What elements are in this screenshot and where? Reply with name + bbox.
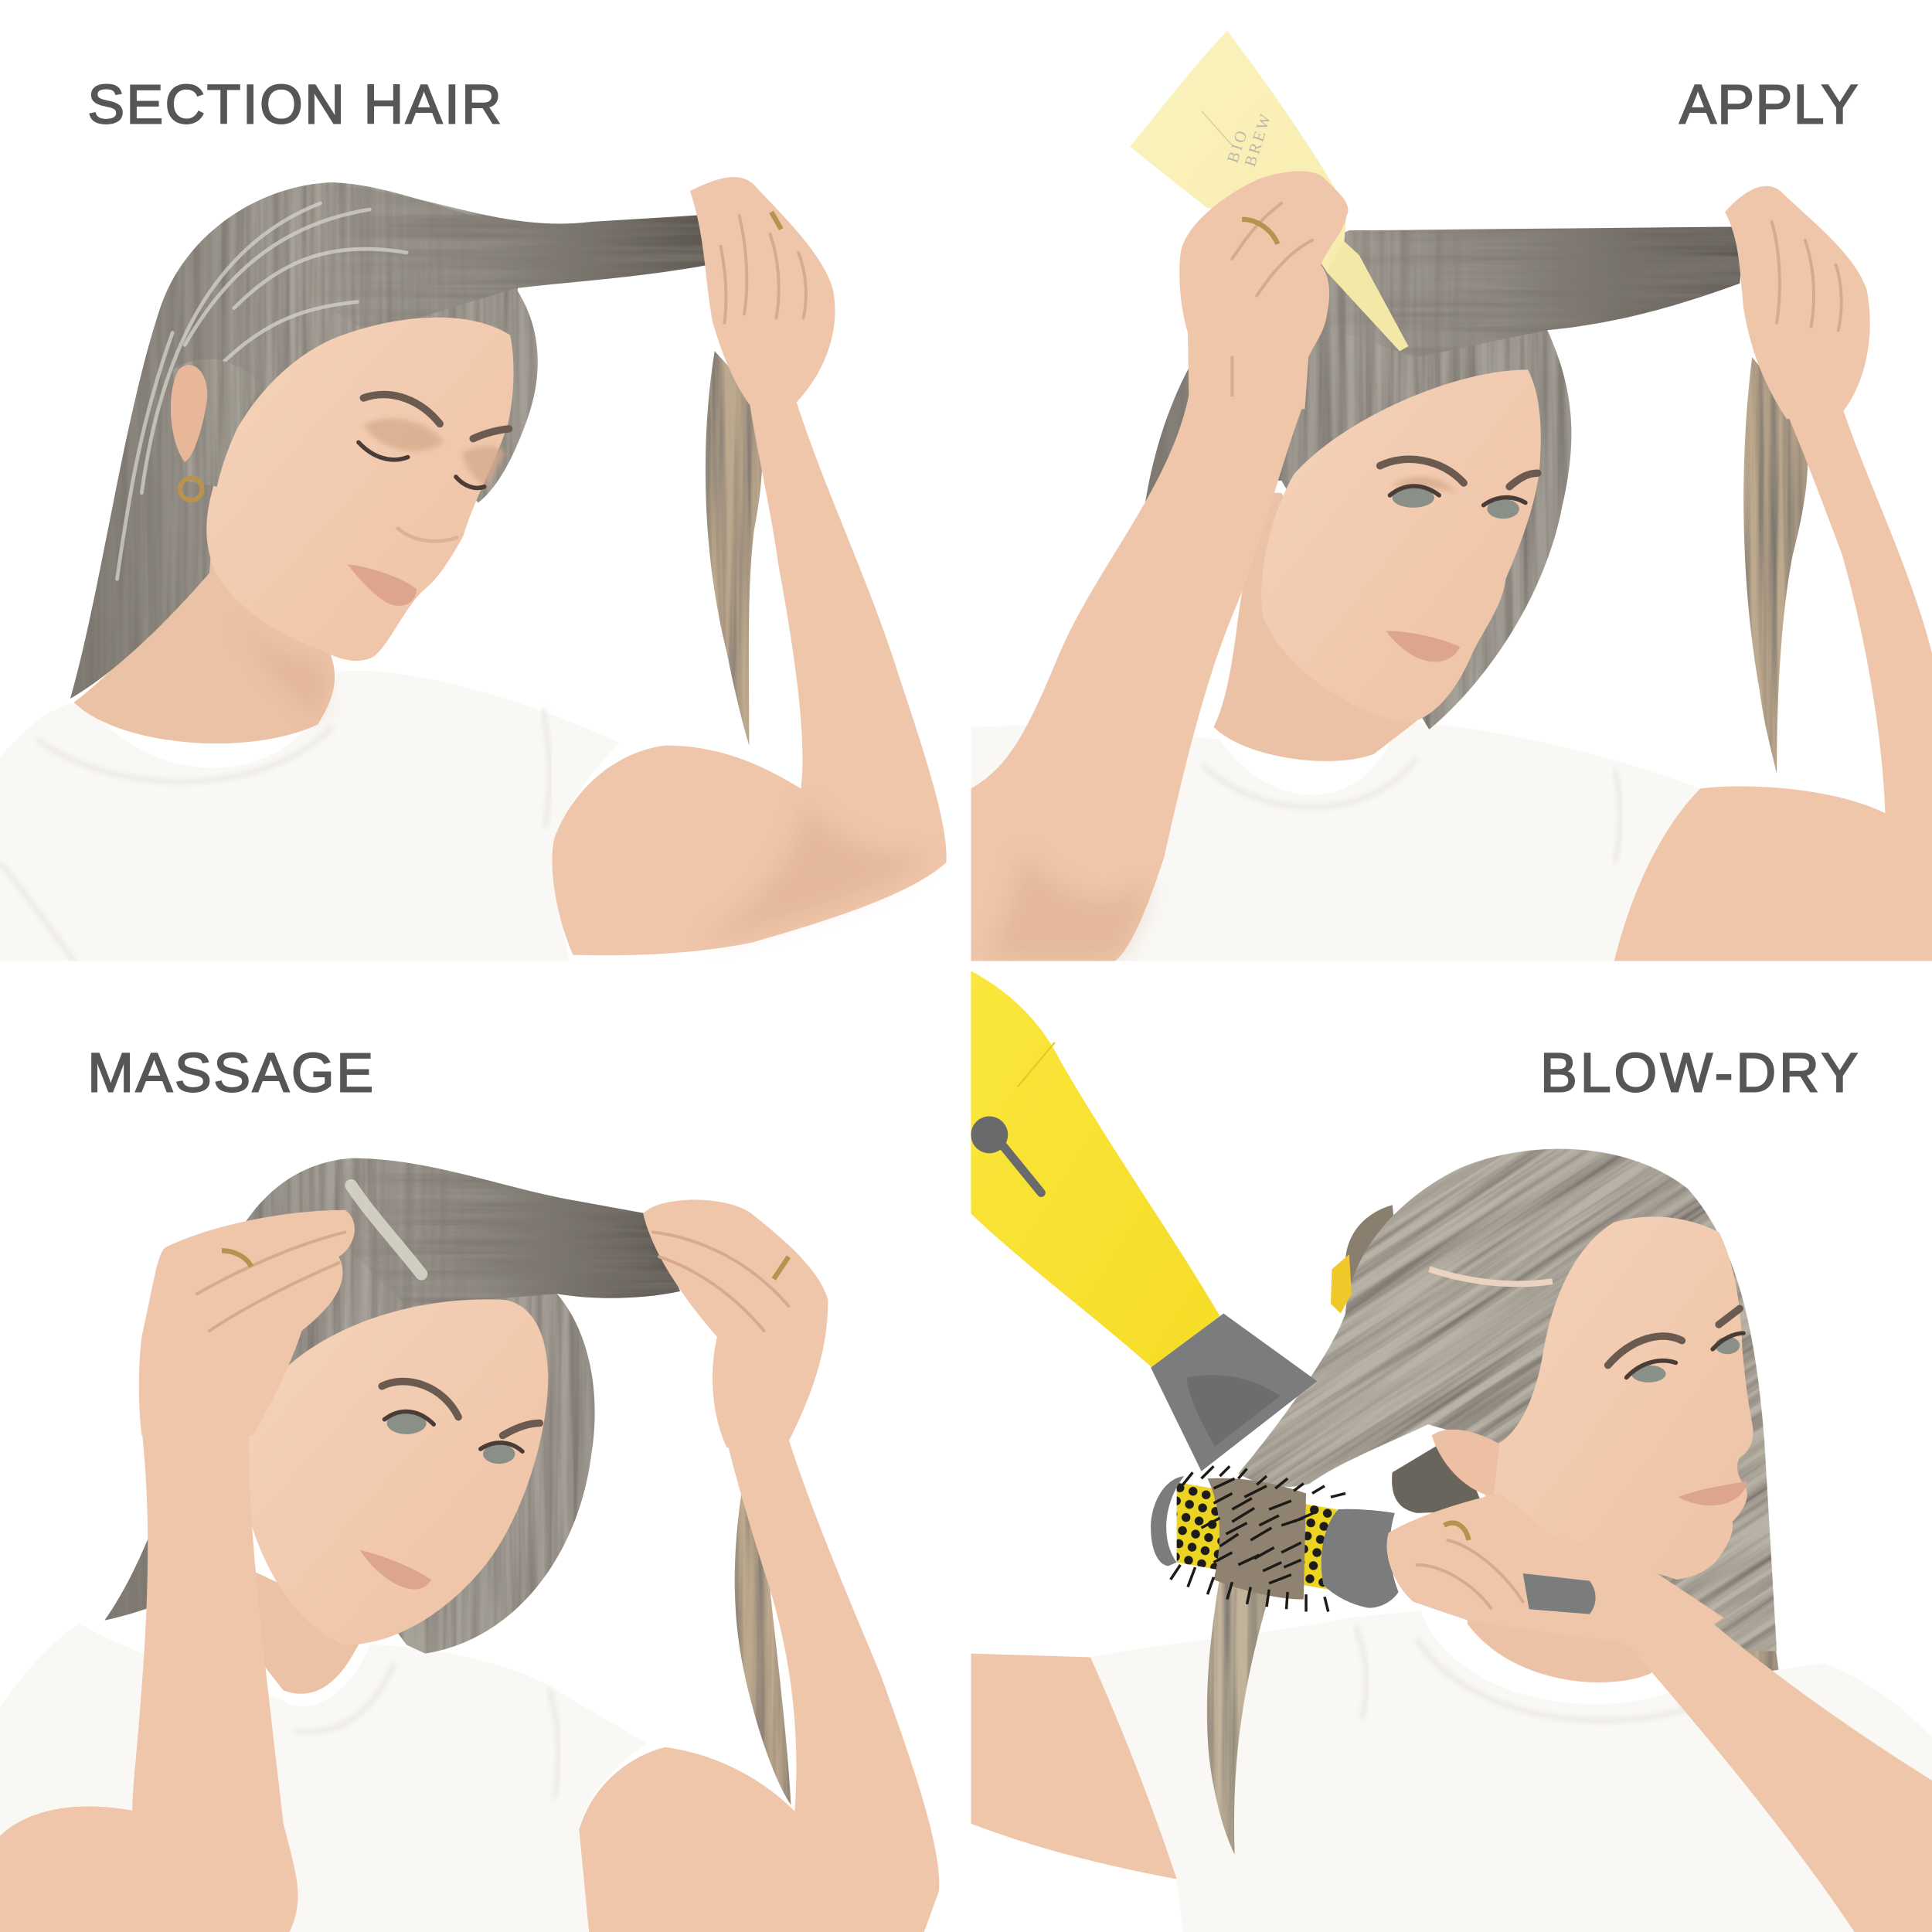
hair: head and blown strands — [1009, 903, 1932, 1897]
panel: section hair — [0, 73, 947, 961]
hair wrapped in bristles — [1207, 1478, 1306, 1600]
upper arm left — [0, 1806, 197, 1932]
tube brand label: BIO — [1225, 127, 1252, 165]
right arm — [579, 1439, 939, 1932]
right arm — [1614, 406, 1932, 961]
hair: dangling strands — [706, 351, 763, 746]
tube of product — [1130, 31, 1408, 351]
facial features — [1380, 459, 1538, 662]
right arm — [1639, 1573, 1932, 1932]
neck — [74, 543, 335, 743]
shirt — [971, 721, 1700, 961]
hair: dangling strands — [1743, 357, 1808, 774]
hair dryer — [971, 971, 1317, 1471]
hair: side section — [1140, 230, 1571, 730]
panel: blow-dry — [971, 903, 1932, 1932]
neck — [1213, 493, 1417, 761]
face — [244, 1299, 548, 1645]
facial features — [360, 1382, 539, 1590]
hair: temple wisps — [172, 359, 261, 487]
dryer body — [971, 971, 1219, 1368]
panel: apply — [971, 31, 1932, 961]
brush barrel — [1177, 1482, 1337, 1590]
arm shading — [702, 798, 930, 943]
hair: long back strands right — [1688, 1565, 1811, 1932]
left arm shading — [986, 850, 1152, 958]
shirt — [0, 671, 620, 961]
facial features — [1608, 1308, 1747, 1505]
right hand gripping hair — [1725, 186, 1870, 419]
face — [1261, 369, 1541, 723]
hair: side section — [70, 182, 538, 699]
left arm — [971, 1654, 1177, 1879]
heading: apply: APPLY — [1679, 73, 1858, 135]
left arm — [132, 1429, 298, 1932]
hair: pulled section — [308, 185, 713, 332]
hand holding brush — [1387, 1493, 1724, 1663]
neck — [1460, 1515, 1677, 1682]
left hand massaging — [139, 1210, 355, 1435]
scalp part highlight — [351, 1185, 421, 1274]
raised arm — [552, 396, 947, 955]
hair clip — [1331, 1254, 1352, 1314]
hair: dangling strands — [735, 1491, 791, 1805]
brush end cap — [1151, 1476, 1184, 1566]
facial features — [348, 395, 509, 606]
neck — [240, 1565, 369, 1694]
brush handle — [1523, 1573, 1596, 1614]
heading: blow-dry: BLOW-DRY — [1540, 1043, 1858, 1104]
rings — [222, 1250, 788, 1279]
left hand holding tube — [1179, 171, 1348, 409]
hair: strand highlights — [117, 203, 406, 579]
dryer nozzle — [1151, 1314, 1317, 1471]
hair: pulled section — [1306, 226, 1745, 357]
round brush — [1151, 1466, 1399, 1611]
panel: massage — [0, 1043, 939, 1932]
hand gripping hair — [690, 177, 835, 404]
brush collar — [1321, 1509, 1399, 1608]
hair: section part — [1429, 1269, 1553, 1284]
hair: back of head bun — [1345, 1205, 1399, 1294]
ring — [1242, 219, 1277, 244]
dryer seam — [1018, 1043, 1055, 1087]
tube brand label second line: BREW — [1242, 111, 1275, 168]
shirt — [0, 1624, 647, 1932]
ring — [771, 212, 781, 230]
right hand — [643, 1200, 828, 1447]
dryer switch — [971, 1117, 1041, 1192]
brush bristles — [1171, 1466, 1345, 1611]
hair: side section — [105, 1158, 595, 1654]
hair: pulled section — [321, 1158, 680, 1306]
hair: strands below brush — [1207, 1577, 1269, 1855]
heading: section hair: SECTION HAIR — [87, 73, 502, 135]
heading: massage: MASSAGE — [87, 1043, 373, 1104]
face — [206, 318, 514, 661]
shirt — [1090, 1611, 1932, 1932]
neck shading — [272, 658, 331, 716]
face — [1485, 1216, 1753, 1580]
ear — [1432, 1430, 1499, 1497]
left arm — [971, 394, 1304, 961]
ring — [1444, 1523, 1469, 1540]
hair: darker under section — [1392, 1435, 1485, 1513]
ear and earring — [171, 365, 207, 500]
dryer nozzle opening — [1186, 1375, 1281, 1447]
